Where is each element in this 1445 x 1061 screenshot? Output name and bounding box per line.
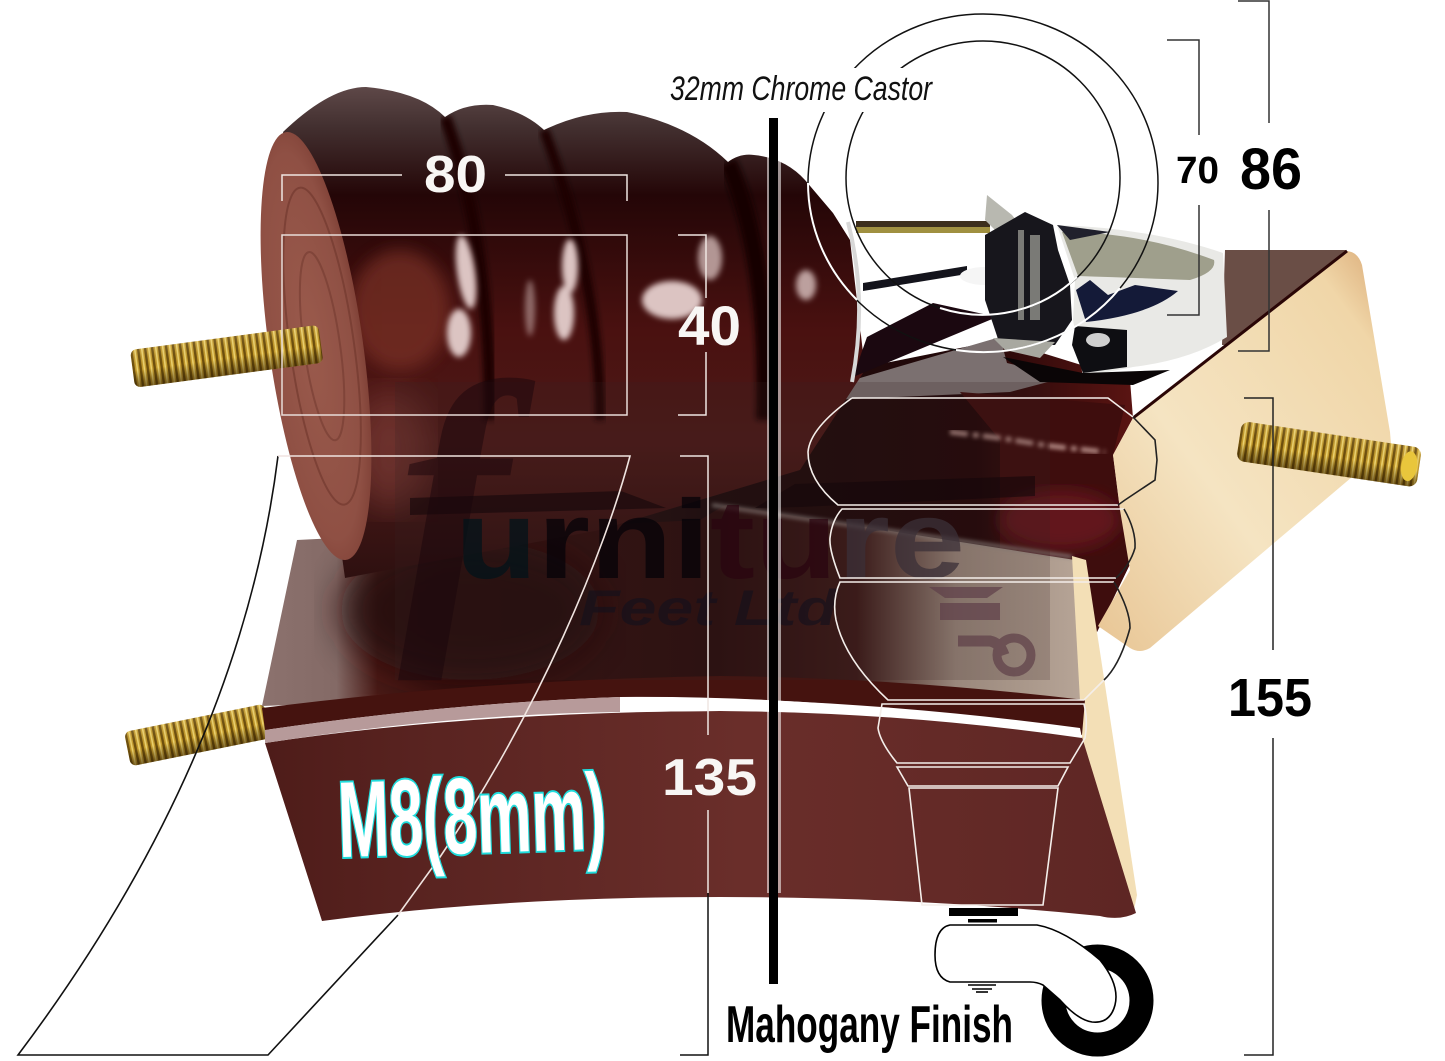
profile: middle ring right side: [1116, 509, 1135, 578]
rear curved foot: [345, 250, 1422, 651]
chrome castor: [848, 195, 1227, 385]
watermark wordmark: urni ture: [455, 477, 965, 602]
rear foot end grain face: [1098, 251, 1391, 651]
castor arm rods: [856, 221, 1010, 291]
dimension: 80 bracket: [282, 175, 627, 201]
profile: collar band: [897, 767, 1068, 786]
diagram mount plate: [949, 908, 1018, 916]
rear foot end grain shadow: [1133, 251, 1347, 418]
dimension value 86: 86: [1240, 137, 1302, 202]
curved base footprint outline: [18, 456, 630, 1055]
rear foot side band: [960, 392, 1132, 632]
castor lower black recess: [1072, 326, 1127, 373]
edge band dark upper part: [262, 676, 1085, 735]
rear foot dark top face: [1222, 250, 1347, 345]
dimension: 40 bracket: [678, 235, 706, 415]
spindle shading and reflections: [350, 117, 816, 510]
castor caption backing: [668, 68, 936, 112]
castor blue reflection: [1076, 280, 1178, 322]
dimension value 70: 70: [1176, 150, 1219, 192]
castor recess highlight: [1086, 333, 1110, 347]
dimension value 135: 135: [662, 749, 757, 807]
diagram base lines: [968, 985, 996, 992]
top face reflection: [340, 540, 600, 680]
castor ring dark upper rim: [1057, 225, 1110, 240]
centre divider line: [767, 118, 781, 984]
castor caption: 32mm Chrome Castor: [670, 70, 933, 108]
thread size label: M8(8mm): [336, 751, 608, 880]
profile: tapered leg: [909, 788, 1058, 905]
profile: middle ring: [830, 509, 1124, 578]
diagram arm: [935, 925, 1116, 1022]
watermark lamp icon: [929, 587, 1003, 620]
spindle gloss highlights: [447, 234, 816, 357]
watermark logo: [395, 317, 1050, 682]
dimension: 155 bracket: [1244, 398, 1273, 1055]
dimension: 86 bracket: [1238, 1, 1269, 351]
rear block lit edge line: [712, 505, 1072, 557]
castor socket ring: [848, 222, 859, 382]
front block front face: [265, 711, 1136, 921]
watermark panel: [395, 382, 1050, 680]
profile: large bulb right side: [1104, 582, 1130, 680]
castor peak chrome: [985, 195, 1025, 240]
castor base shadow: [1003, 357, 1170, 385]
dimension value 155: 155: [1228, 668, 1312, 728]
spindle silhouette: [283, 87, 865, 578]
rear foot lit top surface: [830, 337, 1067, 400]
front block top face: [262, 505, 1088, 706]
dimension value 80: 80: [424, 146, 487, 204]
profile: top bulb: [808, 398, 1133, 505]
circle segments over dark areas: [808, 183, 1120, 352]
profile: large bulb: [835, 582, 1114, 700]
watermark subline: Feet Ltd: [579, 580, 839, 636]
castor column light strips: [993, 230, 1055, 358]
watermark castor icon: [958, 638, 1031, 672]
spindle diameter box: [282, 235, 627, 415]
diagram wheel: [1054, 956, 1142, 1044]
castor diagram: [935, 908, 1142, 1044]
watermark letter f: f: [398, 317, 537, 682]
threaded stud: rear foot: [1236, 421, 1422, 487]
edge band bright highlight: [620, 697, 1082, 738]
dimension: castor wheel circles: [808, 14, 1158, 352]
edge band mottled highlight: [265, 697, 620, 743]
spindle end disc: [239, 126, 393, 566]
dimension: 135 bracket: [680, 456, 708, 1055]
castor ring body: [1057, 225, 1227, 377]
castor ring interior: [1062, 232, 1214, 280]
rear foot red lit area: [1000, 490, 1120, 550]
threaded stud: front block: [124, 704, 271, 766]
profile: top bulb right side: [1118, 417, 1157, 505]
castor dark column: [985, 212, 1072, 345]
rear foot highlight streaks: [950, 432, 1105, 452]
castor neck shadow cone: [853, 303, 997, 377]
dark backing between spindle and rear foot: [345, 340, 1133, 632]
front curved base block: [124, 505, 1137, 921]
dimension: 70 bracket: [1167, 40, 1199, 315]
watermark roof bars: [410, 476, 1035, 515]
finish caption: Mahogany Finish: [726, 996, 1013, 1054]
turned mahogany spindle: [130, 87, 865, 578]
profile: lower collar: [878, 704, 1086, 763]
threaded stud: spindle: [130, 325, 323, 388]
dimension value 40: 40: [678, 294, 741, 357]
foot profile outline: [808, 398, 1157, 905]
front block end edge: [1072, 556, 1137, 915]
